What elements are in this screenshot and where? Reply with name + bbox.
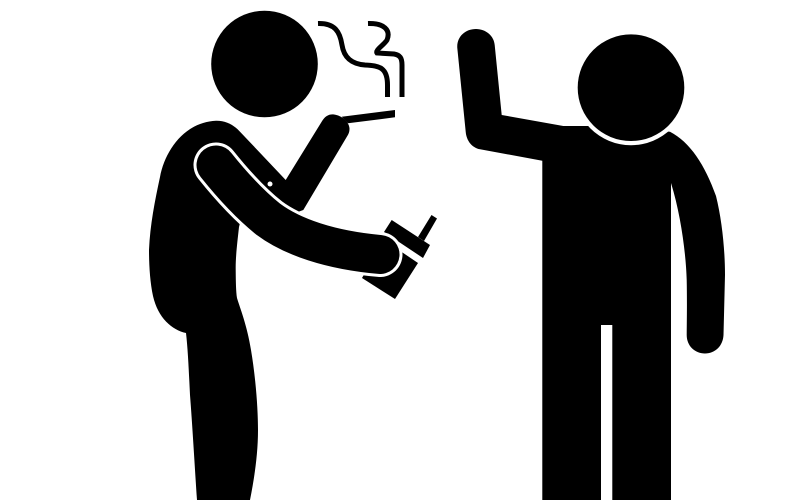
arm fill [216,165,380,254]
body, raised arm and legs [457,29,725,500]
head: second person [578,34,684,141]
cup lid [384,220,430,258]
smoke wisp: left [318,23,388,97]
icon: cigarette [342,110,395,123]
smoke wisp: right [368,23,402,97]
white ring around head [574,30,688,145]
cup straw [418,215,437,241]
arm: holding the cup, outlined in white [216,165,380,254]
arm outline [216,165,380,254]
figure: smoking person holding a drink [149,11,437,500]
figure: person raising a hand [457,29,725,500]
small white dot near elbow [268,182,272,186]
icon: drink cup with lid and straw [362,215,437,299]
body and legs: smoker with raised forearm [149,114,350,500]
icon: smoke wisps [318,23,402,97]
head: smoker [211,11,318,117]
cup body [362,240,418,299]
